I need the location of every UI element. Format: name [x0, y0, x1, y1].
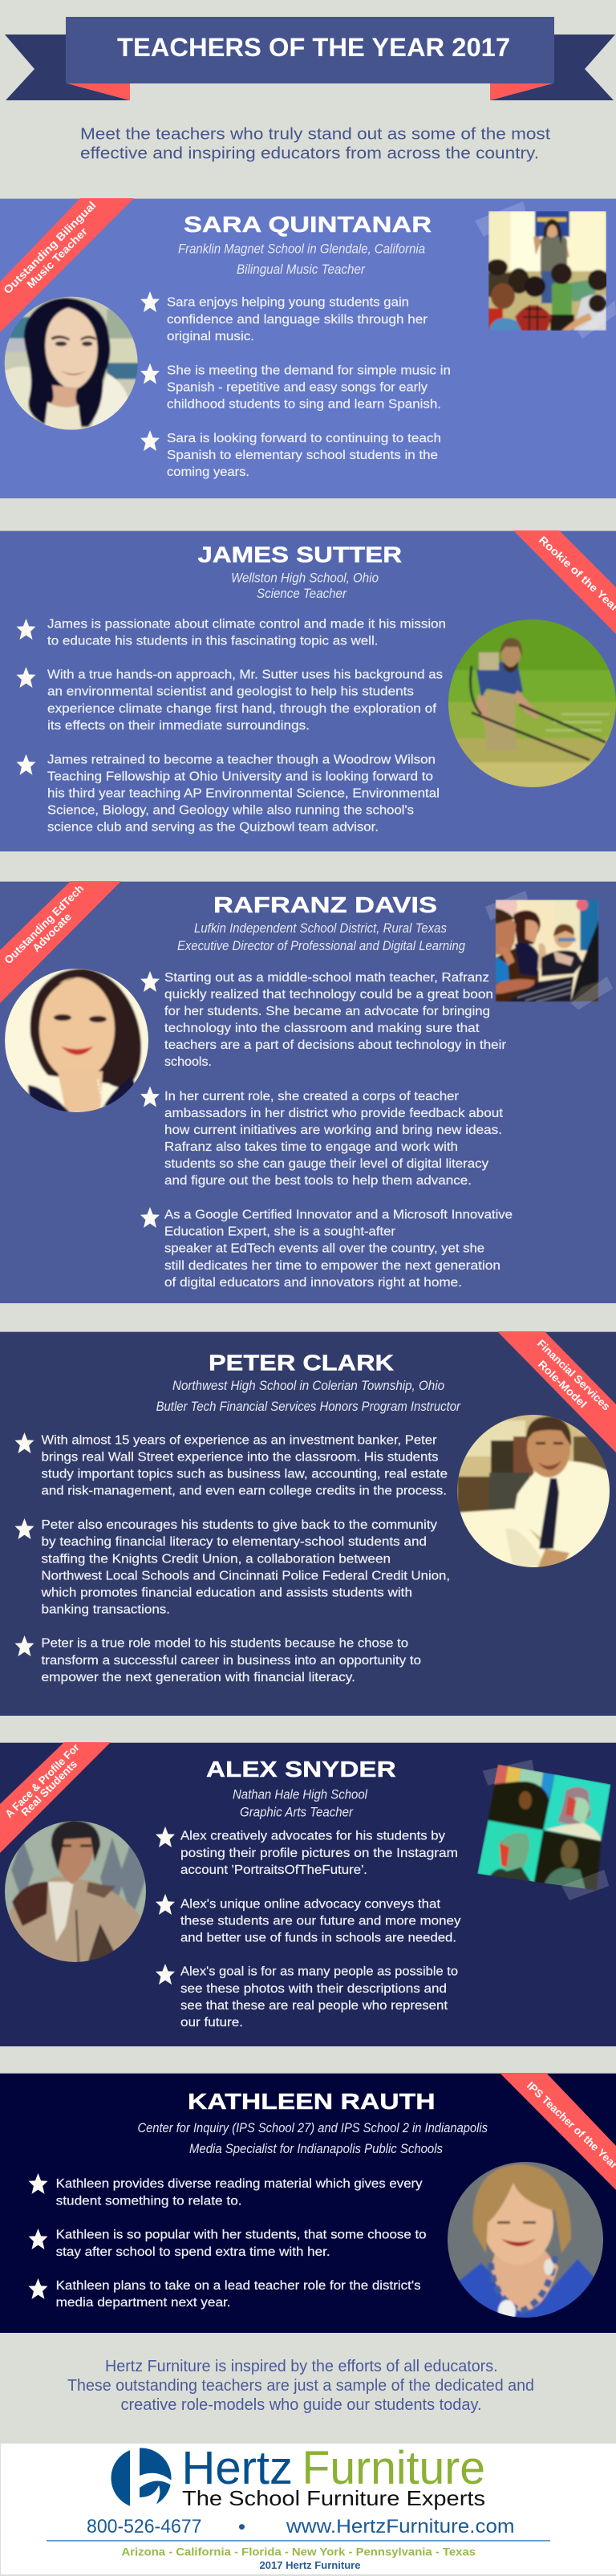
bullet list: With a true hands-on approach, Mr. Sutter uses his background as — [47, 668, 443, 682]
separator dot — [239, 2524, 245, 2529]
bullet list: Alex's goal is for as many people as possible to — [180, 1965, 458, 1979]
ribbon: Outstanding EdTech Advocate: Outstanding EdTech — [2, 882, 86, 966]
bullet list: Education Expert, she is a sought-after — [164, 1225, 395, 1239]
panel: Kathleen Rauth — [0, 2073, 616, 2333]
bullet list: media department next year. — [56, 2296, 231, 2310]
bullet list: study important topics such as business law, accounting, real estate — [42, 1468, 448, 1481]
portrait: Alex — [3, 1819, 148, 1964]
bullet list: staffing the Knights Credit Union, a collaboration between — [42, 1552, 391, 1566]
bullet list: banking transactions. — [42, 1603, 170, 1616]
bullet list: ambassadors in her district who provide feedback about — [164, 1107, 504, 1120]
school and role — [231, 571, 379, 601]
bullet list: Kathleen plans to take on a lead teacher role for the district's — [56, 2279, 421, 2293]
ribbon: Financial Services Role-Model: Financial Services — [535, 1337, 613, 1413]
closing statement: Hertz Furniture is inspired by the efforts of all educators. — [105, 2358, 498, 2375]
logo wordmark: Hertz — [181, 2442, 293, 2494]
bullet list: science club and serving as the Quizbowl team advisor. — [47, 821, 379, 835]
bullet list: Starting out as a middle-school math teacher, Rafranz — [164, 971, 489, 985]
website: www.HertzFurniture.com — [286, 2516, 515, 2537]
bullet list: Science, Biology, and Geology while also running the school's — [47, 804, 414, 818]
bullet list: speaker at EdTech events all over the country, yet she — [164, 1242, 484, 1256]
bullet list: Spanish - repetitive and easy songs for early — [167, 380, 428, 395]
bullet list: confidence and language skills through her — [167, 313, 428, 327]
bullet list: teachers are a part of decisions about technology in their — [164, 1038, 506, 1052]
bullet list: coming years. — [167, 465, 249, 479]
portrait: Rafranz — [4, 968, 150, 1117]
school and role: Butler Tech Financial Services Honors Program Instructor — [156, 1400, 461, 1414]
school and role: Lufkin Independent School District, Rural Texas — [194, 921, 447, 936]
ribbon: Outstanding EdTech Advocate: Advocate — [30, 910, 74, 954]
bullet list: and risk-management, and even earn college credits in the process. — [42, 1485, 447, 1498]
bullet list: student something to relate to. — [56, 2194, 242, 2208]
bullet list — [140, 291, 451, 479]
bullet list: stay after school to spend extra time with her. — [56, 2245, 330, 2259]
bullet list: brings real Wall Street experience into the classroom. His students — [42, 1450, 439, 1464]
ribbon: Outstanding EdTech Advocate — [0, 881, 121, 1003]
bullet list: With almost 15 years of experience as an investment banker, Peter — [42, 1433, 436, 1447]
copyright: 2017 Hertz Furniture — [260, 2559, 361, 2571]
photo: James in river — [445, 618, 616, 790]
tagline: The School Furniture Experts — [182, 2486, 485, 2510]
ribbon: Outstanding Bilingual Music Teacher: Music Teacher — [25, 225, 90, 291]
ribbon: Financial Services Role-Model — [497, 1331, 616, 1453]
name heading: KATHLEEN RAUTH — [188, 2089, 436, 2114]
ribbon: A Face and Profile For Real Students: Real Students — [19, 1757, 79, 1818]
bullet list: these students are our future and more money — [180, 1914, 461, 1928]
bullet list: Rafranz also takes time to engage and work with — [164, 1140, 458, 1154]
ribbon: A Face and Profile For Real Students: A Face & Profile For — [3, 1741, 82, 1820]
name heading: PETER CLARK — [209, 1351, 394, 1375]
portrait: Sara — [5, 297, 138, 430]
ribbon: Outstanding Bilingual Music Teacher — [0, 198, 134, 332]
bullet list: Northwest Local Schools and Cincinnati Police Federal Credit Union, — [42, 1569, 450, 1583]
bullet list: Spanish to elementary school students in the — [167, 449, 438, 462]
school and role: Center for Inquiry (IPS School 27) and IPS School 2 in Indianapolis — [138, 2121, 488, 2135]
intro text: Meet the teachers who truly stand out as some of the most — [80, 125, 550, 143]
school and role: Science Teacher — [257, 587, 347, 601]
bullet list: how current initiatives are working and bring new ideas. — [164, 1123, 502, 1137]
bullet list — [140, 971, 513, 1290]
bullet list: empower the next generation with financial literacy. — [42, 1671, 355, 1684]
bullet list: Kathleen provides diverse reading material which gives every — [56, 2177, 423, 2191]
bullet list: and better use of funds in schools are needed. — [180, 1931, 456, 1944]
panel: Rafranz Davis — [0, 881, 616, 1303]
bullet list: Peter is a true role model to his students because he chose to — [42, 1637, 408, 1651]
bullet list: schools. — [164, 1055, 212, 1069]
bullet list: students so she can gauge their level of digital literacy — [164, 1157, 488, 1171]
bullet list: our future. — [180, 2016, 243, 2030]
panel: James Sutter — [0, 530, 616, 851]
bullet list: to educate his students in this fascinating topic as well. — [47, 634, 379, 648]
photo: Instagram portraits — [477, 1760, 611, 1900]
school and role: Northwest High School in Colerian Township, Ohio — [172, 1379, 444, 1393]
name heading: ALEX SNYDER — [206, 1757, 396, 1782]
bullet list — [14, 1432, 450, 1684]
bullet list: transform a successful career in business into an opportunity to — [42, 1654, 421, 1668]
school and role — [177, 921, 466, 953]
school and role: Franklin Magnet School in Glendale, California — [178, 242, 425, 257]
footer: Hertz Furniture — [1, 2442, 616, 2574]
school and role: Executive Director of Professional and Digital Learning — [177, 939, 466, 953]
bullet list: James is passionate about climate control and made it his mission — [47, 617, 446, 631]
bullet list: Sara is looking forward to continuing to teach — [167, 432, 441, 445]
bullet list: see these photos with their descriptions and — [180, 1982, 447, 1996]
name heading: SARA QUINTANAR — [184, 212, 432, 237]
ribbon: A Face and Profile For Real Students — [0, 1741, 111, 1853]
logo wordmark: Furniture — [302, 2442, 485, 2494]
panel: Peter Clark — [0, 1331, 616, 1716]
bullet list: Peter also encourages his students to give back to the community — [42, 1518, 437, 1532]
bullet list: Sara enjoys helping young students gain — [167, 296, 409, 310]
photo: Peter at table — [456, 1412, 614, 1569]
logo mark — [111, 2446, 172, 2510]
school and role: Wellston High School, Ohio — [231, 571, 379, 586]
bullet list: still dedicates her time to empower the next generation — [164, 1259, 500, 1273]
ribbon: Outstanding Bilingual Music Teacher: Outstanding Bilingual — [2, 199, 98, 296]
bullet list: In her current role, she created a corps of teacher — [164, 1090, 459, 1103]
bullet list: see that these are real people who represent — [180, 1999, 448, 2013]
ribbon: Financial Services Role-Model: Role-Model — [536, 1358, 589, 1410]
ribbon: Rookie of the Year — [513, 530, 616, 634]
bullet list — [16, 617, 446, 835]
bullet list: by teaching financial literacy to elementary-school students and — [42, 1535, 427, 1549]
bullet list: quickly realized that technology could be a great boon — [164, 988, 493, 1002]
bullet list: for her students. She became an advocate for bringing — [164, 1005, 490, 1018]
phone number: 800-526-4677 — [87, 2516, 202, 2537]
ribbon: Rookie of the Year: Rookie of the Year — [537, 534, 616, 614]
bullet list: Teaching Fellowship at Ohio University and is looking forward to — [47, 770, 433, 783]
bullet list: technology into the classroom and making sure that — [164, 1022, 480, 1035]
panel: Sara Quintanar — [0, 198, 616, 498]
bullet list: James retrained to become a teacher though a Woodrow Wilson — [47, 753, 436, 766]
panel: Alex Snyder — [0, 1741, 616, 2046]
title: TEACHERS OF THE YEAR 2017 — [117, 33, 510, 62]
name heading: JAMES SUTTER — [197, 542, 402, 567]
logo wordmark — [181, 2442, 485, 2494]
bullet list — [156, 1826, 461, 2030]
bullet list: of digital educators and innovators right at home. — [164, 1276, 462, 1290]
school and role: Bilingual Music Teacher — [237, 262, 366, 277]
school and role — [138, 2121, 488, 2156]
school and role — [178, 242, 425, 277]
closing statement: These outstanding teachers are just a sample of the dedicated and — [67, 2377, 534, 2395]
states: Arizona - California - Florida - New York - Pennsylvania - Texas — [122, 2545, 476, 2558]
bullet list: posting their profile pictures on the Instagram — [180, 1847, 458, 1860]
bullet list: account 'PortraitsOfTheFuture'. — [180, 1863, 367, 1877]
bullet list: childhood students to sing and learn Spanish. — [167, 398, 441, 411]
school and role — [156, 1379, 461, 1414]
bullet list: Alex's unique online advocacy conveys that — [180, 1897, 441, 1911]
bullet list: Kathleen is so popular with her students, that some choose to — [56, 2229, 427, 2242]
school and role: Graphic Arts Teacher — [240, 1806, 354, 1820]
closing statement — [67, 2358, 534, 2414]
bullet list: original music. — [167, 330, 254, 343]
school and role: Nathan Hale High School — [233, 1788, 368, 1802]
school and role — [233, 1788, 368, 1820]
bullet list: which promotes financial education and assists students with — [40, 1586, 412, 1599]
bullet list: experience climate change first hand, through the exploration of — [47, 702, 437, 716]
photo: students at laptop — [485, 891, 613, 1010]
school and role: Media Specialist for Indianapolis Public Schools — [189, 2142, 443, 2156]
intro text: effective and inspiring educators from across the country. — [80, 144, 539, 162]
bullet list: She is meeting the demand for simple music in — [167, 364, 451, 377]
bullet list: an environmental scientist and geologist to help his students — [47, 685, 414, 699]
bullet list: Alex creatively advocates for his students by — [180, 1830, 445, 1843]
bullet list — [29, 2173, 427, 2310]
ribbon: IPS Teacher of the Year — [500, 2073, 616, 2190]
portrait: Kathleen — [446, 2160, 605, 2322]
closing statement: creative role-models who guide our students today. — [120, 2396, 481, 2414]
photo: classroom — [475, 201, 616, 339]
name heading: RAFRANZ DAVIS — [213, 892, 437, 917]
bullet list: his third year teaching AP Environmental Science, Environmental — [47, 786, 440, 800]
bullet list: As a Google Certified Innovator and a Microsoft Innovative — [164, 1209, 513, 1222]
title banner — [5, 17, 615, 100]
bullet list: its effects on their immediate surroundings. — [47, 719, 310, 733]
intro text — [80, 125, 550, 162]
bullet list: and figure out the best tools to help them advance. — [164, 1174, 472, 1188]
